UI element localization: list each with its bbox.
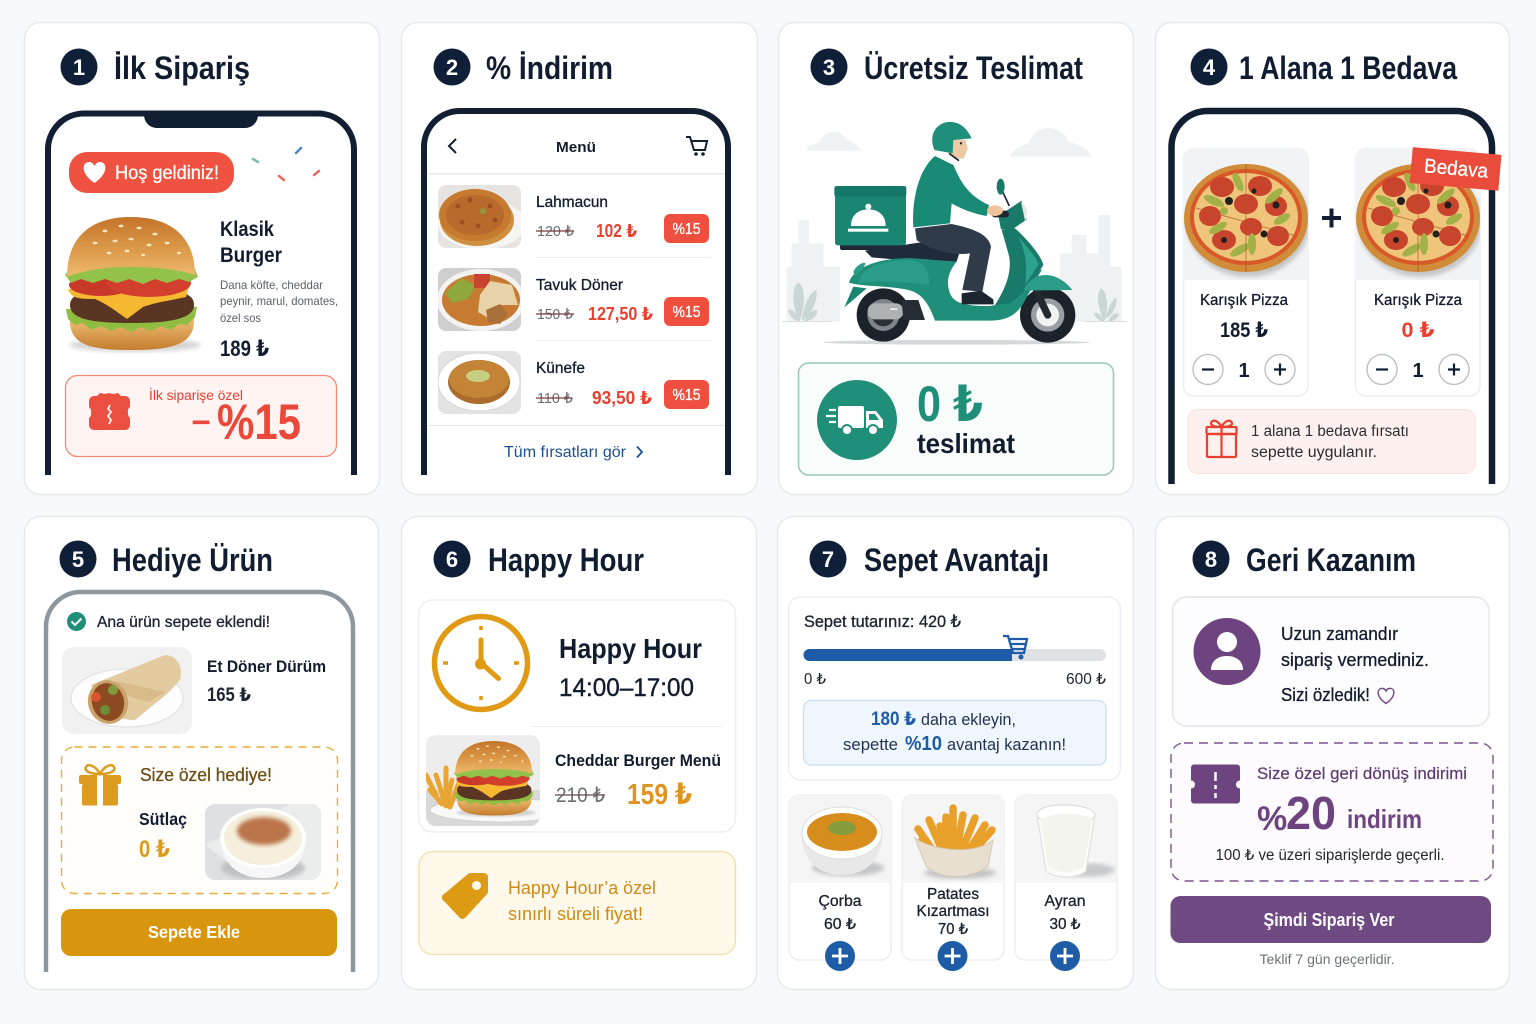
- discount box: [66, 376, 336, 456]
- info box: daha ekleyin,: [921, 711, 1016, 729]
- pizza card right: [1355, 149, 1482, 396]
- win-back coupon: [1171, 743, 1493, 881]
- pizza card left: Karışık Pizza: [1200, 292, 1288, 309]
- happy hour card: 14:00–17:00: [559, 674, 694, 702]
- discount tag: %15: [672, 304, 700, 321]
- number badge 4: 4: [1203, 55, 1216, 80]
- win-back message card: [1172, 597, 1489, 726]
- heading: Hediye Ürün: [112, 542, 273, 578]
- discount tag: [664, 297, 709, 326]
- heading: Happy Hour: [488, 542, 644, 578]
- panel 6: Happy Hour: [402, 516, 756, 990]
- info box: [804, 700, 1106, 765]
- win-back message card: Uzun zamandır: [1281, 623, 1398, 644]
- number badge 5: 5: [72, 547, 84, 572]
- number badge 7: [810, 540, 846, 578]
- add to cart button: Sepete Ekle: [148, 922, 240, 942]
- number badge 6: 6: [446, 547, 458, 572]
- win-back message card: sipariş vermediniz.: [1281, 649, 1429, 670]
- menu row: Künefe: 93,50 ₺: [592, 388, 652, 408]
- quantity control: 1: [1412, 360, 1424, 382]
- free delivery box: teslimat: [917, 428, 1015, 459]
- app header: Menü: [556, 139, 596, 156]
- quantity control: 1: [1238, 360, 1250, 382]
- coupon icon: [89, 393, 130, 430]
- food photo: tavuk doner: [437, 268, 525, 331]
- main product: Et Döner Dürüm: [207, 658, 326, 676]
- offer note: [1188, 410, 1475, 474]
- panel 5: Hediye Ürün: [24, 516, 378, 990]
- item: Ayran: [1015, 795, 1117, 971]
- basket progress card: 600 ₺: [1066, 671, 1106, 688]
- product description: [220, 278, 338, 325]
- menu row: Künefe: Künefe: [536, 360, 585, 377]
- basket progress card: 0 ₺: [804, 671, 826, 688]
- icon: price tag: [442, 873, 488, 919]
- menu row: Tavuk Döner: Tavuk Döner: [536, 277, 623, 294]
- menu row: Künefe: 110 ₺: [537, 390, 573, 407]
- free delivery box: [798, 363, 1114, 475]
- gift box: Sütlaç: [139, 809, 187, 829]
- discount tag: %15: [672, 387, 700, 404]
- info box: sepette: [843, 736, 898, 754]
- icon: gift: [79, 765, 121, 806]
- menu row: Tavuk Döner: [437, 268, 709, 331]
- icon: heart: [1378, 688, 1394, 704]
- product name: Burger: [220, 244, 282, 267]
- panel 1: İlk Sipariş: [24, 22, 380, 494]
- happy hour card: 159 ₺: [627, 779, 692, 811]
- icon: ticket: [1191, 764, 1240, 804]
- gift box: [62, 747, 338, 894]
- offer note: 1 alana 1 bedava fırsatı: [1251, 423, 1409, 440]
- pizza card right: 0 ₺: [1402, 319, 1435, 342]
- heading: Geri Kazanım: [1246, 542, 1416, 578]
- panel 3: Ücretsiz Teslimat: [778, 22, 1134, 494]
- food photo: ayran glass: [1015, 795, 1117, 883]
- product description: peynir, marul, domates,: [220, 294, 338, 308]
- box: [840, 244, 903, 250]
- product description: özel sos: [220, 311, 261, 325]
- food photo: rice pudding: [205, 804, 321, 880]
- food photo: fries: [902, 795, 1004, 883]
- discount box: İlk siparişe özel: [149, 388, 243, 403]
- item: Çorba: Çorba: [818, 893, 862, 910]
- menu row: Lahmacun: Lahmacun: [536, 194, 608, 211]
- see all link: Tüm fırsatları gör: [504, 444, 626, 461]
- food photo: lahmacun: [438, 185, 526, 249]
- info box: %10: [905, 733, 942, 755]
- limited price note: [419, 852, 736, 954]
- limited price note: sınırlı süreli fiyat!: [508, 904, 643, 924]
- menu row: Lahmacun: 120 ₺: [537, 223, 574, 240]
- menu row: Lahmacun: [438, 185, 709, 249]
- order now button: [1170, 896, 1491, 943]
- discount tag: %15: [672, 221, 700, 238]
- discount tag: [664, 214, 709, 243]
- discount value: [191, 394, 301, 450]
- add to cart button: [61, 909, 337, 956]
- rider: [915, 224, 991, 292]
- win-back coupon: Size özel geri dönüş indirimi: [1257, 764, 1467, 783]
- happy hour card: [418, 600, 736, 832]
- info box: 180 ₺: [871, 709, 916, 730]
- order now button: Şimdi Sipariş Ver: [1264, 910, 1394, 930]
- discount tag: [664, 380, 709, 409]
- happy hour card: Cheddar Burger Menü: [555, 752, 721, 770]
- discount value: %15: [217, 394, 301, 450]
- welcome pill: Hoş geldiniz!: [115, 163, 219, 184]
- item: Çorba: 60 ₺: [824, 916, 856, 933]
- pizza card right: Karışık Pizza: [1374, 292, 1462, 309]
- heading: % İndirim: [486, 50, 613, 86]
- item: Patates Kızartması: Kızartması: [916, 903, 990, 920]
- free ribbon: [1410, 147, 1501, 191]
- offer note: sepette uygulanır.: [1251, 444, 1377, 461]
- panel 2: % İndirim: [402, 22, 758, 494]
- menu row: Tavuk Döner: 150 ₺: [537, 306, 573, 323]
- burger photo: [65, 217, 201, 352]
- add button: [938, 941, 968, 971]
- heading: 1 Alana 1 Bedava: [1239, 50, 1457, 86]
- plus sign: [1322, 208, 1341, 228]
- number badge 2: 2: [446, 55, 458, 80]
- number badge 8: [1192, 540, 1230, 578]
- validity note: Teklif 7 gün geçerlidir.: [1260, 951, 1394, 967]
- icon: clock: [434, 616, 528, 710]
- menu row: Tavuk Döner: 127,50 ₺: [588, 304, 653, 324]
- gift box: Size özel hediye!: [140, 765, 272, 785]
- menu row: Lahmacun: 102 ₺: [596, 221, 637, 241]
- item: Ayran: 30 ₺: [1050, 916, 1081, 933]
- basket progress card: Sepet tutarınız: 420 ₺: [804, 613, 961, 631]
- number badge 5: [60, 540, 96, 578]
- phone frame: [424, 111, 728, 475]
- number badge 4: [1190, 48, 1228, 86]
- quantity control: [1367, 354, 1469, 384]
- product name: [220, 218, 282, 267]
- win-back coupon: 100 ₺ ve üzeri siparişlerde geçerli.: [1216, 847, 1444, 864]
- welcome pill: [69, 152, 234, 193]
- number badge 3: [810, 48, 848, 86]
- number badge 6: [434, 540, 470, 578]
- phone frame: [46, 592, 353, 972]
- number badge 8: 8: [1205, 547, 1217, 572]
- heading: Sepet Avantajı: [864, 542, 1049, 578]
- item: Ayran: Ayran: [1044, 893, 1086, 910]
- icon: cart: [1003, 636, 1027, 660]
- product name: Klasik: [220, 218, 274, 241]
- gift box: 0 ₺: [139, 836, 170, 863]
- heading: İlk Sipariş: [114, 50, 250, 86]
- number badge 3: 3: [823, 55, 835, 80]
- menu row: Künefe: [438, 351, 709, 414]
- panel 8: Geri Kazanım: [1156, 516, 1510, 990]
- panel 7: Sepet Avantajı: [778, 516, 1134, 990]
- price: 189 ₺: [220, 336, 269, 361]
- number badge 2: [434, 48, 470, 86]
- item: Patates Kızartması: Patates: [927, 886, 979, 903]
- discount value: −: [191, 394, 211, 450]
- product description: Dana köfte, cheddar: [220, 278, 323, 292]
- phone frame: [1172, 111, 1492, 484]
- pizza card left: 185 ₺: [1220, 319, 1268, 342]
- scooter: [844, 287, 867, 307]
- info box: avantaj kazanın!: [947, 736, 1066, 754]
- number badge 7: 7: [822, 547, 834, 572]
- item: Patates Kızartması: [902, 795, 1004, 971]
- scooter courier illustration: [782, 122, 1128, 345]
- added notice: Ana ürün sepete eklendi!: [97, 614, 270, 631]
- happy hour card: Happy Hour: [559, 633, 702, 664]
- pizza card left: [1183, 149, 1310, 396]
- food photo: wrap: [62, 647, 192, 734]
- progress bar: [804, 649, 1106, 661]
- app header: [428, 137, 725, 174]
- add button: [1050, 941, 1080, 971]
- win-back coupon: %: [1257, 800, 1287, 838]
- free delivery box: 0 ₺: [917, 376, 983, 432]
- icon: user avatar: [1194, 618, 1260, 685]
- quantity control: [1193, 354, 1295, 384]
- number badge 1: 1: [73, 55, 85, 80]
- main product: [62, 647, 326, 734]
- number badge 1: [60, 48, 98, 86]
- heading: Ücretsiz Teslimat: [864, 50, 1083, 86]
- win-back coupon: indirim: [1347, 804, 1422, 834]
- happy hour card: 210 ₺: [556, 784, 605, 807]
- icon: gift: [1206, 421, 1236, 457]
- win-back message card: Sizi özledik!: [1281, 685, 1370, 705]
- win-back coupon: 20: [1286, 787, 1336, 839]
- main product: 165 ₺: [207, 685, 251, 706]
- panel 4: 1 Alana 1 Bedava: [1156, 22, 1510, 494]
- add button: [825, 941, 855, 971]
- food photo: kunefe: [438, 351, 521, 414]
- icon: delivery truck: [817, 380, 897, 460]
- free ribbon: Bedava: [1423, 155, 1490, 183]
- item: Çorba: [789, 795, 891, 971]
- limited price note: Happy Hour’a özel: [508, 878, 656, 898]
- food photo: burger menu: [426, 735, 540, 826]
- basket progress card: [788, 597, 1120, 780]
- confetti: [253, 148, 319, 180]
- food photo: soup: [789, 795, 891, 883]
- phone frame: [48, 113, 354, 475]
- item: Patates Kızartması: 70 ₺: [938, 921, 968, 938]
